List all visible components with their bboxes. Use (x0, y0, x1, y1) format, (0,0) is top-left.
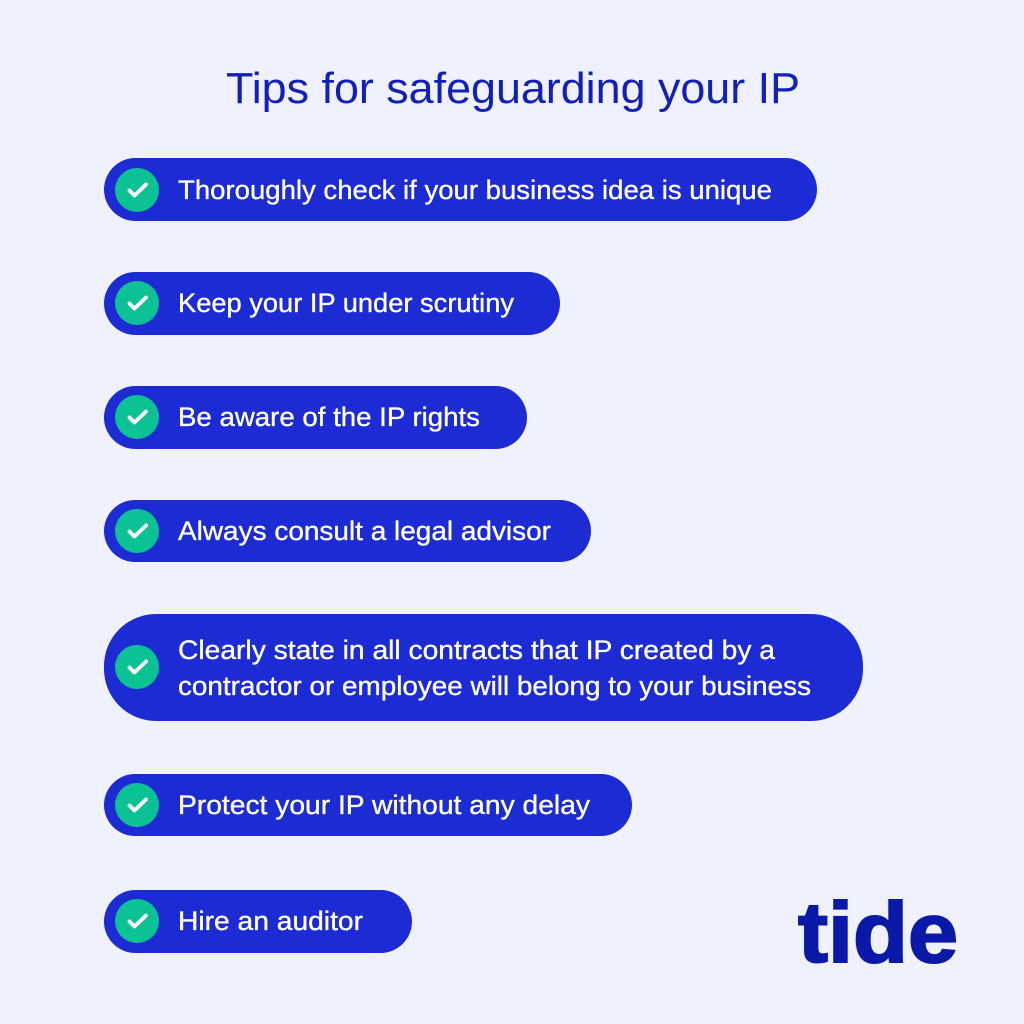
icon: check 4 (115, 509, 159, 553)
tip 3 text: Be aware of the IP rights (178, 402, 480, 432)
icon: check 6 (115, 783, 159, 827)
tip 4 pill (104, 500, 591, 562)
tip 7 pill (104, 890, 412, 953)
tip 1 pill (104, 158, 817, 221)
tip 5 text: contractor or employee will belong to your business (178, 671, 811, 701)
tip 1 text: Thoroughly check if your business idea is unique (178, 175, 772, 205)
tip 6 pill (104, 774, 632, 836)
icon: check 3 (115, 395, 159, 439)
icon: check 5 (115, 645, 159, 689)
tip 2 pill (104, 272, 560, 335)
tip 3 pill (104, 386, 527, 449)
tip 7 text: Hire an auditor (178, 906, 363, 936)
tip 5 text (178, 635, 811, 701)
icon: check 1 (115, 168, 159, 212)
tip 2 text: Keep your IP under scrutiny (178, 288, 515, 318)
title: Tips for safeguarding your IP (226, 64, 800, 113)
icon: check 7 (115, 899, 159, 943)
tip 5 text: Clearly state in all contracts that IP created by a (178, 635, 775, 665)
tip 6 text: Protect your IP without any delay (178, 790, 591, 820)
logo: tide: tide (798, 886, 958, 981)
tip 4 text: Always consult a legal advisor (178, 516, 551, 546)
tip 5 pill (104, 614, 863, 721)
icon: check 2 (115, 281, 159, 325)
